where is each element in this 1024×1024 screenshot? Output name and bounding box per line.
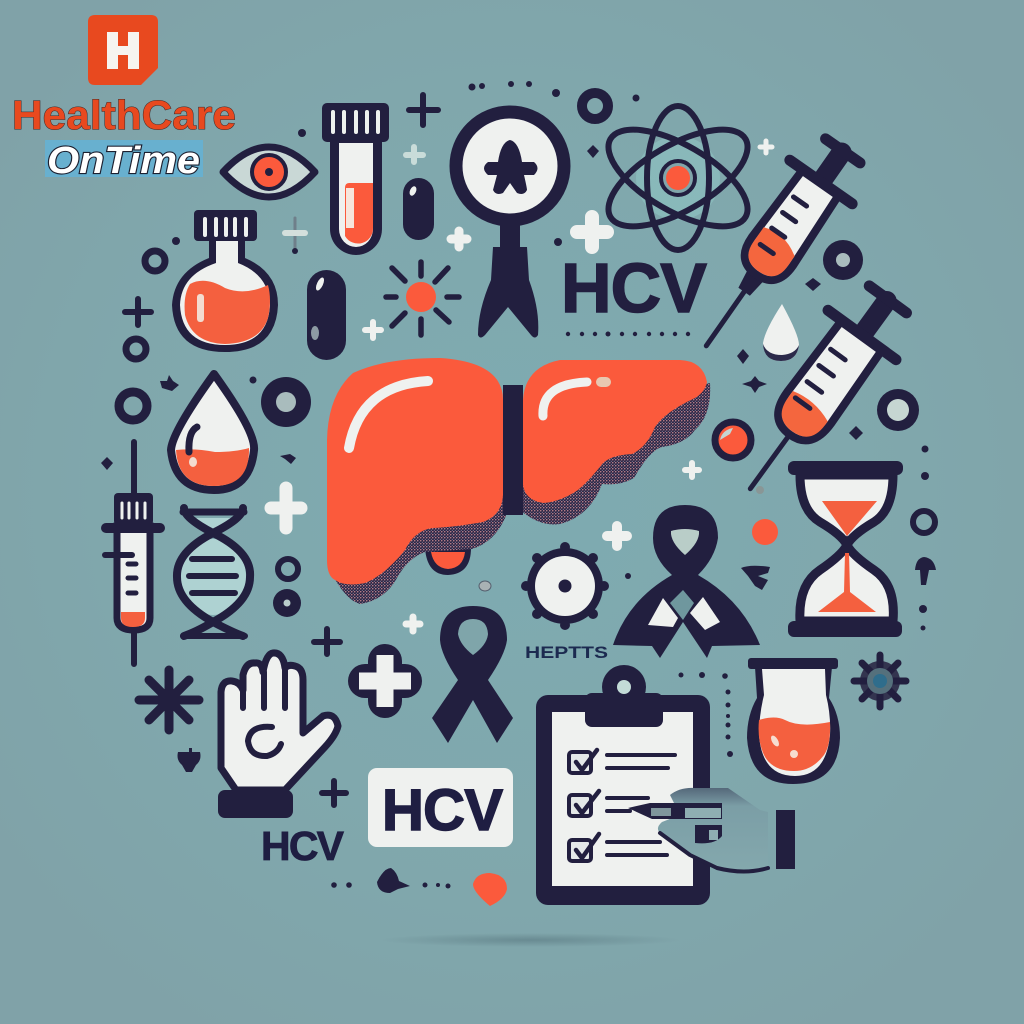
icon: hand xyxy=(218,653,338,818)
icon: atom xyxy=(594,106,762,250)
label: HEPTTS: HEPTTS xyxy=(525,643,608,662)
label box: HCV xyxy=(368,768,513,847)
icon: large capsule xyxy=(307,270,346,360)
icon: asterisk burst xyxy=(139,670,199,730)
icon: white droplet xyxy=(763,304,799,361)
icon: syringe lower xyxy=(716,275,922,513)
check item 2 xyxy=(569,791,648,816)
liver speckled underside right xyxy=(520,383,710,524)
icon: dark plus near HCV xyxy=(322,781,346,805)
icon: hand with pen xyxy=(628,788,795,872)
icon: large ribbon xyxy=(613,505,760,658)
icon: magnifier with star xyxy=(456,112,564,338)
liver right lobe xyxy=(523,360,707,503)
icon: eye xyxy=(223,147,315,197)
icon: dark plus top xyxy=(409,95,438,125)
icon: small capsule xyxy=(403,178,434,240)
icon: DNA helix xyxy=(177,508,250,636)
label: HCV small: HCV xyxy=(261,823,345,869)
icon: hourglass xyxy=(788,461,903,637)
logo tag: OnTime: OnTime xyxy=(47,140,200,182)
icons: white plus marks xyxy=(271,141,772,631)
icon: gear wheel xyxy=(521,542,609,630)
clipboard paper xyxy=(552,712,693,886)
clipboard clip xyxy=(585,665,663,727)
icon: plus outlined xyxy=(359,655,411,707)
label box: HCV: HCV xyxy=(382,778,503,843)
icon: small gear xyxy=(854,655,906,707)
liver central ligament xyxy=(503,385,523,515)
icon: vertical syringe xyxy=(105,442,160,664)
icon: black ribbon xyxy=(432,606,513,743)
clipboard board xyxy=(536,695,710,905)
icon: blood drop xyxy=(171,374,254,490)
icon: grey speck under liver xyxy=(479,581,491,591)
icon: syringe upper xyxy=(675,129,874,368)
icon: dark plus near flask xyxy=(125,299,151,325)
liver left lobe xyxy=(327,358,503,584)
icon: test tube xyxy=(322,103,389,255)
icon: dark plus near DNA xyxy=(314,629,340,654)
logo icon: H badge xyxy=(88,15,158,85)
icon: clipboard checklist xyxy=(536,665,710,905)
check item 1 xyxy=(569,750,675,773)
logo: HealthCare OnTime xyxy=(12,15,236,182)
liver speckled underside left xyxy=(330,480,506,604)
icon: liver xyxy=(327,358,710,604)
heading: HCV large: HCV xyxy=(561,249,707,327)
check item 3 xyxy=(569,834,667,861)
icon: pale cross with shadow xyxy=(285,218,305,254)
dotted row under HCV xyxy=(566,332,690,336)
liver highlights xyxy=(349,377,611,448)
logo wordmark: HealthCare: HealthCare xyxy=(12,92,236,138)
dotted column beside beaker xyxy=(678,672,733,757)
liver gallbladder xyxy=(425,548,471,575)
decorative dots and stars xyxy=(101,81,936,893)
icon: red burst xyxy=(386,262,459,335)
icon: flask xyxy=(172,210,278,352)
decorative rings and blobs xyxy=(119,93,935,906)
icon: beaker xyxy=(747,658,840,784)
